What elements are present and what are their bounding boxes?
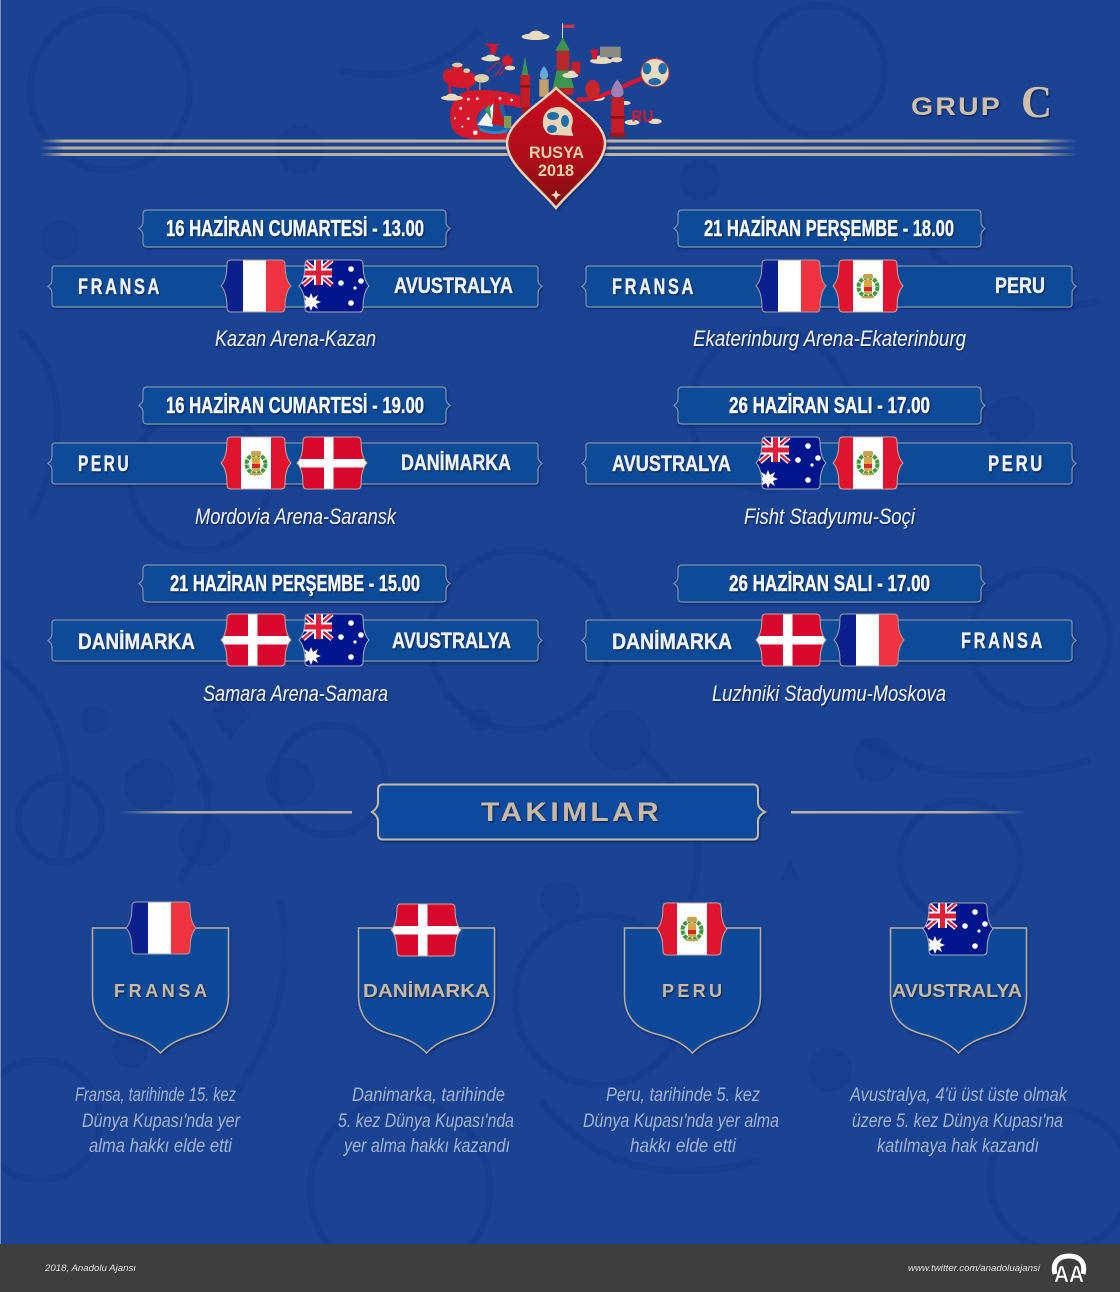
flag: Denmark [756, 614, 826, 666]
footer: www.twitter.com/anadoluajansi [908, 1263, 1041, 1274]
flag: Peru [833, 260, 903, 312]
illustration: right tower [611, 79, 623, 97]
header illustration: Russia landmarks [441, 23, 669, 140]
team card: Avustralya: AVUSTRALYA [892, 981, 1022, 1001]
description [75, 1085, 241, 1157]
flag: Australia [299, 260, 369, 312]
flag: Denmark [297, 437, 367, 489]
venue: Samara Arena-Samara [203, 681, 388, 706]
heading: Grup C: GRUP [911, 93, 1002, 121]
description: üzere 5. kez Dünya Kupası'na [852, 1111, 1063, 1132]
date label [139, 387, 450, 424]
match: Peru - Danimarka, Saransk: DANİMARKA [401, 450, 511, 475]
match: Fransa - Peru, Ekaterinburg: 21 HAZİRAN PERŞEMBE - 18.00 [704, 215, 954, 241]
match: Danimarka - Fransa, Moskova: 26 HAZİRAN SALI - 17.00 [729, 570, 930, 596]
illustration: horseman [443, 64, 477, 93]
team card: Peru [583, 903, 779, 1157]
flag: Australia [923, 903, 993, 955]
shield [92, 928, 228, 1053]
team card: Danimarka: DANİMARKA [363, 981, 490, 1001]
shield [890, 928, 1026, 1053]
match: Peru - Danimarka, Saransk: 16 HAZİRAN CUMARTESİ - 19.00 [166, 392, 424, 418]
illustration: clouds [441, 31, 662, 125]
description [583, 1085, 779, 1157]
heading: Grup C: C [1021, 76, 1052, 127]
description: 5. kez Dünya Kupası'nda [338, 1111, 514, 1132]
teams bar [582, 266, 1076, 307]
illustration: big green tower [555, 37, 570, 51]
illustration: ribbon [577, 78, 642, 100]
date label [674, 387, 985, 424]
header rule lines [40, 140, 1077, 156]
match: Fransa - Avustralya, Kazan: AVUSTRALYA [394, 273, 513, 298]
description [338, 1085, 514, 1157]
flag: Peru [657, 903, 727, 955]
flag: France [126, 902, 196, 954]
heading: Takımlar [118, 784, 1025, 840]
badge: Rusya 2018: RUSYA [529, 143, 584, 162]
illustration: left tower [522, 56, 528, 75]
match: Danimarka - Avustralya, Samara: AVUSTRALYA [392, 628, 511, 653]
date label [139, 210, 450, 247]
match: Fransa - Avustralya, Kazan [48, 210, 542, 351]
flag: Denmark [391, 904, 461, 956]
flag: France [756, 260, 826, 312]
match: Danimarka - Fransa, Moskova [582, 565, 1076, 706]
team card: Fransa [75, 902, 241, 1157]
illustration: RU text: RU [631, 108, 653, 125]
description: Dünya Kupası'nda yer alma [583, 1111, 779, 1132]
illustration: onion dome tower [540, 66, 548, 79]
description: Avustralya, 4'ü üst üste olmak [849, 1085, 1068, 1106]
description: hakkı elde etti [630, 1136, 737, 1157]
teams bar [48, 620, 542, 661]
flag: Peru [833, 437, 903, 489]
team card: Danimarka [338, 904, 514, 1157]
teams bar [582, 620, 1076, 661]
footer [0, 1244, 1120, 1292]
match: Fransa - Peru, Ekaterinburg [582, 210, 1076, 351]
venue: Fisht Stadyumu-Soçi [744, 504, 916, 529]
match: Peru - Danimarka, Saransk [48, 387, 542, 529]
match: Avustralya - Peru, Soçi: AVUSTRALYA [612, 451, 731, 476]
icon: Anadolu Agency logo: AA [1054, 1261, 1084, 1287]
match: Avustralya - Peru, Soçi [582, 387, 1076, 529]
description [849, 1085, 1068, 1157]
description: Danimarka, tarihinde [352, 1085, 505, 1106]
flag: Australia [299, 614, 369, 666]
teams bar [582, 443, 1076, 484]
match: Danimarka - Fransa, Moskova: DANİMARKA [612, 629, 732, 654]
date label [674, 565, 985, 602]
flag: Denmark [221, 614, 291, 666]
description: yer alma hakkı kazandı [342, 1136, 510, 1157]
match: Fransa - Avustralya, Kazan: 16 HAZİRAN CUMARTESİ - 13.00 [166, 215, 424, 241]
shield [624, 928, 760, 1053]
description: Dünya Kupası'nda yer [82, 1111, 241, 1132]
heading: Takımlar: TAKIMLAR [481, 797, 662, 827]
venue: Kazan Arena-Kazan [215, 326, 376, 351]
match: Fransa - Peru, Ekaterinburg: PERU [995, 273, 1045, 298]
description: Fransa, tarihinde 15. kez [75, 1085, 236, 1106]
footer: 2018, Anadolu Ajansı [44, 1263, 136, 1274]
date label [674, 210, 985, 247]
description: Peru, tarihinde 5. kez [606, 1085, 760, 1106]
match: Peru - Danimarka, Saransk: PERU [78, 451, 131, 476]
badge: Rusya 2018: 2018 [538, 161, 574, 180]
illustration: red serpent [450, 90, 520, 140]
match: Fransa - Peru, Ekaterinburg: FRANSA [612, 274, 696, 299]
team card: Peru: PERU [662, 981, 722, 1001]
illustration: castle and figure [600, 47, 621, 57]
description: alma hakkı elde etti [89, 1136, 233, 1157]
team card: Avustralya [849, 903, 1068, 1157]
illustration: kite and plane [485, 43, 513, 77]
team card: Fransa: FRANSA [114, 981, 207, 1001]
illustration: ball [641, 59, 669, 87]
flag: Australia [756, 437, 826, 489]
match: Danimarka - Fransa, Moskova: FRANSA [961, 628, 1045, 653]
teams bar [48, 443, 542, 484]
shield [358, 928, 494, 1053]
flag: France [221, 260, 291, 312]
flag: France [834, 614, 904, 666]
match: Avustralya - Peru, Soçi: 26 HAZİRAN SALI - 17.00 [729, 392, 930, 418]
match: Danimarka - Avustralya, Samara: DANİMARKA [78, 629, 195, 654]
description: katılmaya hak kazandı [877, 1136, 1039, 1157]
venue: Luzhniki Stadyumu-Moskova [712, 681, 946, 706]
teams bar [48, 266, 542, 307]
match: Danimarka - Avustralya, Samara: 21 HAZİRAN PERŞEMBE - 15.00 [170, 570, 420, 596]
badge: Rusya 2018 [507, 88, 605, 208]
flag: Peru [221, 437, 291, 489]
match: Fransa - Avustralya, Kazan: FRANSA [78, 274, 162, 299]
date label [139, 565, 450, 602]
icon: world cup emblem [543, 107, 573, 136]
venue: Mordovia Arena-Saransk [195, 504, 397, 529]
venue: Ekaterinburg Arena-Ekaterinburg [693, 326, 967, 351]
heading: Grup C [911, 76, 1052, 127]
match: Avustralya - Peru, Soçi: PERU [988, 451, 1045, 476]
match: Danimarka - Avustralya, Samara [48, 565, 542, 706]
